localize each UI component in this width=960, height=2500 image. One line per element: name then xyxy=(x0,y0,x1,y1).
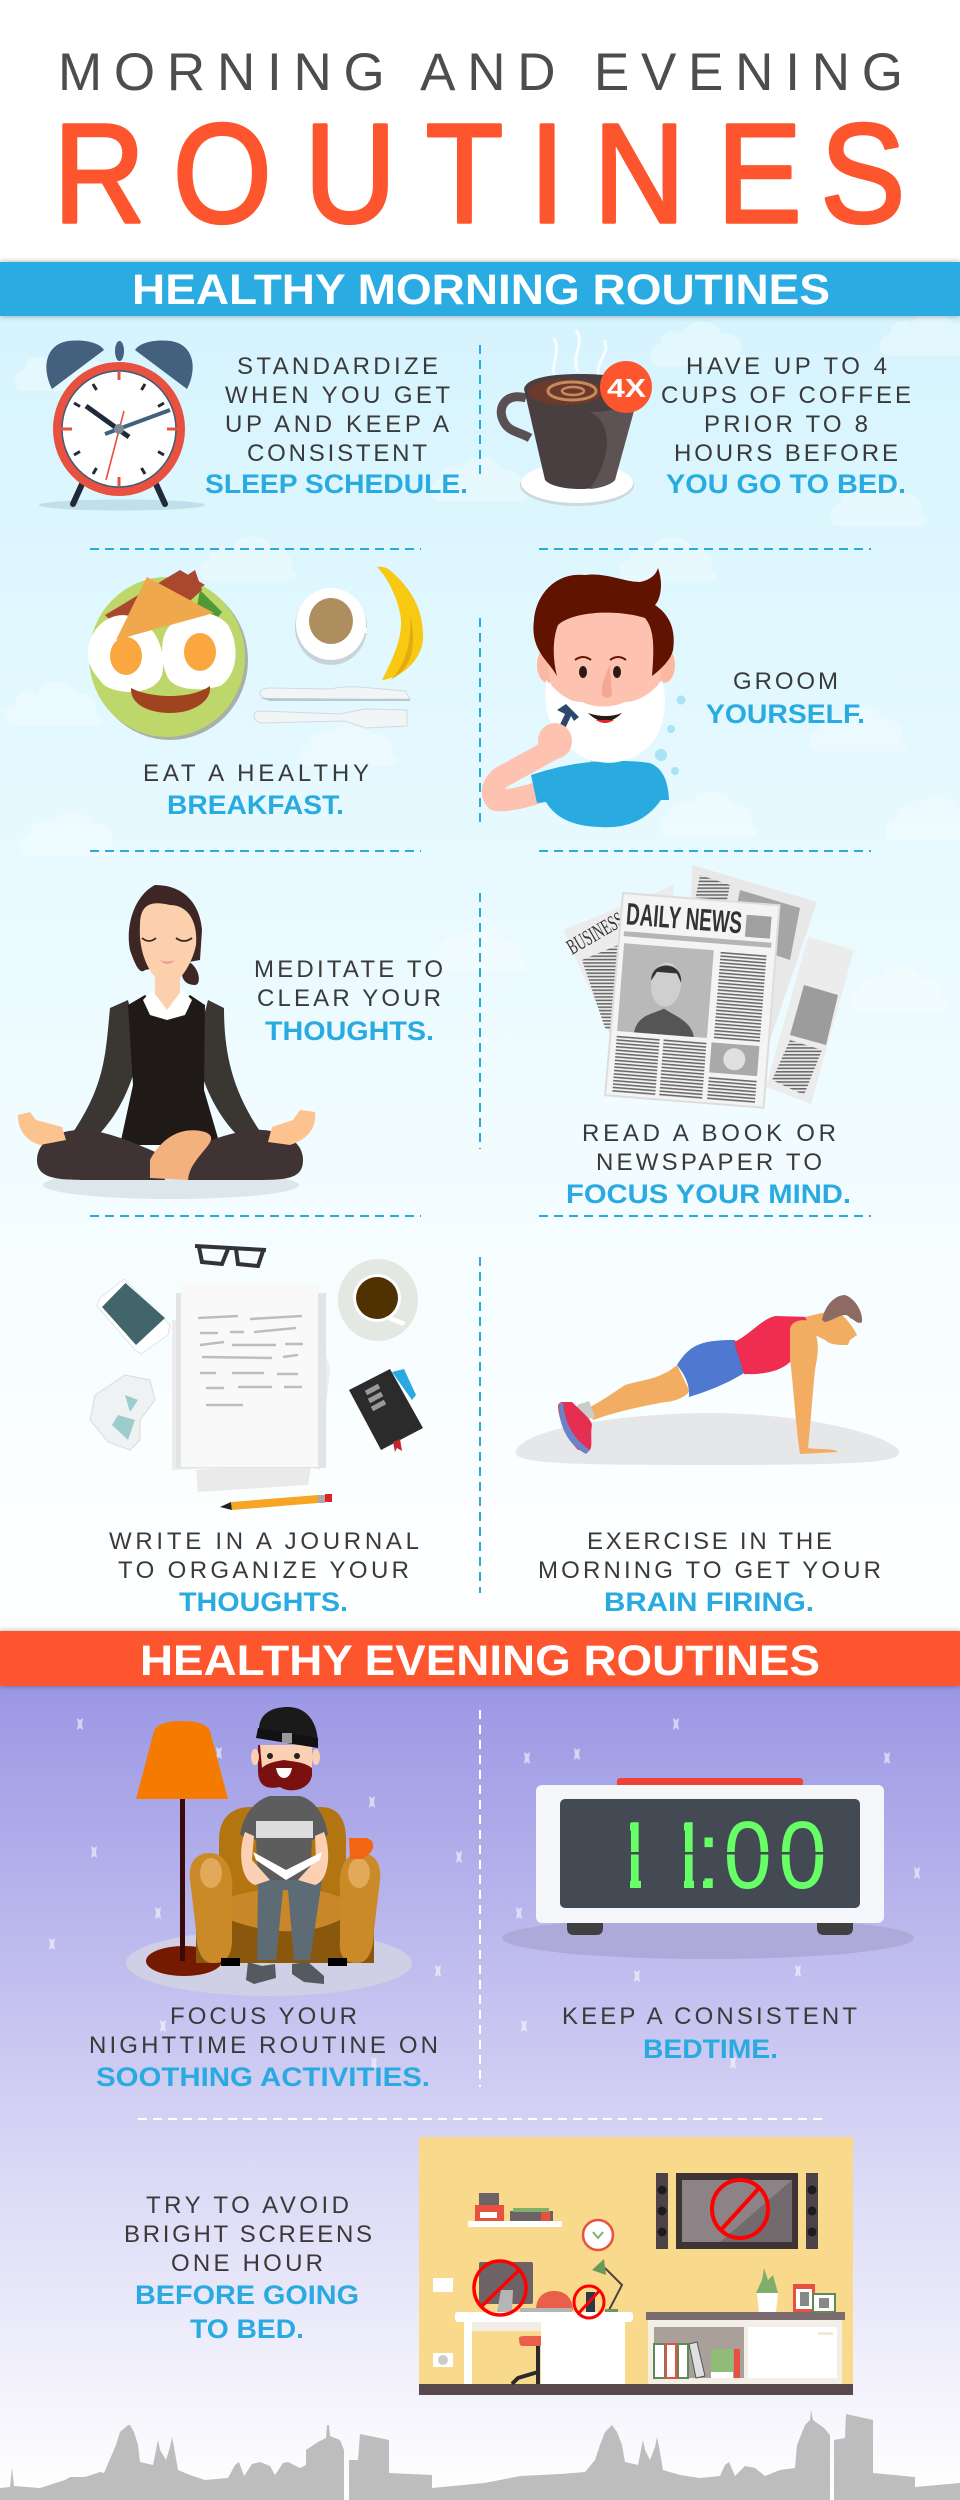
text: coffee xyxy=(661,353,911,499)
text: journal: WRITE IN A JOURNAL xyxy=(109,1528,419,1555)
text: nighttime: FOCUS YOUR xyxy=(170,2003,357,2030)
icon: tv with prohibition xyxy=(656,2173,818,2249)
text: standardize: SLEEP SCHEDULE. xyxy=(205,469,468,499)
text: breakfast xyxy=(143,760,369,820)
title xyxy=(53,43,905,252)
main newspaper page xyxy=(605,893,780,1108)
text: exercise: MORNING TO GET YOUR xyxy=(538,1557,881,1584)
paper stack xyxy=(196,1460,312,1492)
panel: morning background xyxy=(0,312,960,1631)
text: standardize xyxy=(205,353,468,499)
badge: 4x: 4X xyxy=(607,373,647,403)
icon: phone xyxy=(97,1279,170,1354)
text: breakfast: BREAKFAST. xyxy=(167,790,344,820)
text: coffee: YOU GO TO BED. xyxy=(666,469,906,499)
text: bedtime: BEDTIME. xyxy=(643,2034,778,2064)
icon: mug xyxy=(349,1838,373,1859)
illustration: room with screens xyxy=(419,2137,853,2395)
text: meditate: THOUGHTS. xyxy=(265,1016,434,1046)
armchair xyxy=(219,1807,346,1900)
text: coffee: CUPS OF COFFEE xyxy=(661,382,911,409)
title line: morning and evening: MORNING AND EVENING xyxy=(58,43,903,102)
text: screens: BRIGHT SCREENS xyxy=(124,2221,372,2248)
icon: newspapers xyxy=(562,865,854,1108)
text: nighttime xyxy=(89,2003,438,2092)
icon: floor lamp xyxy=(136,1721,228,1976)
text: exercise: BRAIN FIRING. xyxy=(604,1587,814,1617)
icon: cabinet with binders xyxy=(646,2312,845,2384)
icon: plant and frames xyxy=(756,2268,835,2312)
text: journal: THOUGHTS. xyxy=(179,1587,348,1617)
icon: switch and outlet xyxy=(433,2278,453,2367)
text: nighttime: NIGHTTIME ROUTINE ON xyxy=(89,2032,438,2059)
text: journal xyxy=(109,1528,419,1617)
heading band: healthy evening routines xyxy=(0,1631,960,1686)
text: read: NEWSPAPER TO xyxy=(596,1149,822,1176)
text: screens xyxy=(124,2192,372,2344)
text: exercise xyxy=(538,1528,881,1617)
text: coffee: HAVE UP TO 4 xyxy=(686,353,887,380)
icon: coffee saucer xyxy=(338,1259,418,1341)
text: exercise: EXERCISE IN THE xyxy=(587,1528,832,1555)
heading band: healthy morning routines: HEALTHY MORNING ROUTINES xyxy=(132,266,830,314)
text: standardize: CONSISTENT xyxy=(247,440,427,467)
text: daily news masthead: DAILY NEWS xyxy=(625,896,743,940)
text: standardize: WHEN YOU GET xyxy=(225,382,450,409)
text: meditate: MEDITATE TO xyxy=(254,956,443,983)
icon: meditating woman xyxy=(18,885,315,1199)
badge: 4x xyxy=(600,361,652,413)
text: screens: BEFORE GOING xyxy=(135,2280,359,2310)
heading band: healthy morning routines xyxy=(0,262,960,316)
icon: notebook xyxy=(349,1369,423,1452)
text: meditate xyxy=(254,956,443,1046)
text: business masthead: BUSINESS xyxy=(562,907,628,959)
text: bedtime xyxy=(562,2003,857,2064)
text: read xyxy=(566,1120,851,1209)
icon: man reading in armchair xyxy=(126,1707,412,1996)
text: read: FOCUS YOUR MIND. xyxy=(566,1179,851,1209)
icon: breakfast plate xyxy=(88,567,423,740)
text: standardize: UP AND KEEP A xyxy=(225,411,449,438)
icon: crumpled paper xyxy=(90,1375,155,1450)
icon: digital clock xyxy=(502,1778,914,1959)
icon: coffee cup xyxy=(501,330,652,506)
icon: pencil xyxy=(220,1494,332,1510)
text: nighttime: SOOTHING ACTIVITIES. xyxy=(96,2062,430,2092)
icon: man shaving xyxy=(493,568,686,827)
icon: man doing plank xyxy=(516,1295,899,1465)
text: read: READ A BOOK OR xyxy=(582,1120,836,1147)
text: screens: TRY TO AVOID xyxy=(146,2192,349,2219)
title line: routines: ROUTINES xyxy=(53,96,905,252)
skyline xyxy=(0,2410,960,2500)
text: breakfast: EAT A HEALTHY xyxy=(143,760,369,787)
text: groom: YOURSELF. xyxy=(706,699,865,729)
text: screens: ONE HOUR xyxy=(171,2250,323,2277)
text: meditate: CLEAR YOUR xyxy=(257,985,441,1012)
man xyxy=(246,1880,322,1960)
text: screens: TO BED. xyxy=(190,2314,304,2344)
text: standardize: STANDARDIZE xyxy=(237,353,438,380)
heading band: healthy evening routines: HEALTHY EVENING ROUTINES xyxy=(140,1637,820,1685)
icon: wall shelf xyxy=(468,2193,562,2227)
text: journal: TO ORGANIZE YOUR xyxy=(118,1557,409,1584)
icon: glasses xyxy=(195,1246,266,1266)
icon: wall clock xyxy=(583,2220,613,2250)
text: coffee: HOURS BEFORE xyxy=(674,440,898,467)
text: coffee: PRIOR TO 8 xyxy=(704,411,868,438)
icon: journal desk xyxy=(90,1246,423,1510)
text: groom xyxy=(706,668,865,729)
text: groom: GROOM xyxy=(733,668,838,695)
text: bedtime: KEEP A CONSISTENT xyxy=(562,2003,857,2030)
panel: evening background xyxy=(0,1686,960,2500)
clock time: 11:00 xyxy=(609,1802,827,1909)
icon: desk with monitor xyxy=(455,2259,633,2384)
icon: alarm clock xyxy=(39,340,205,510)
